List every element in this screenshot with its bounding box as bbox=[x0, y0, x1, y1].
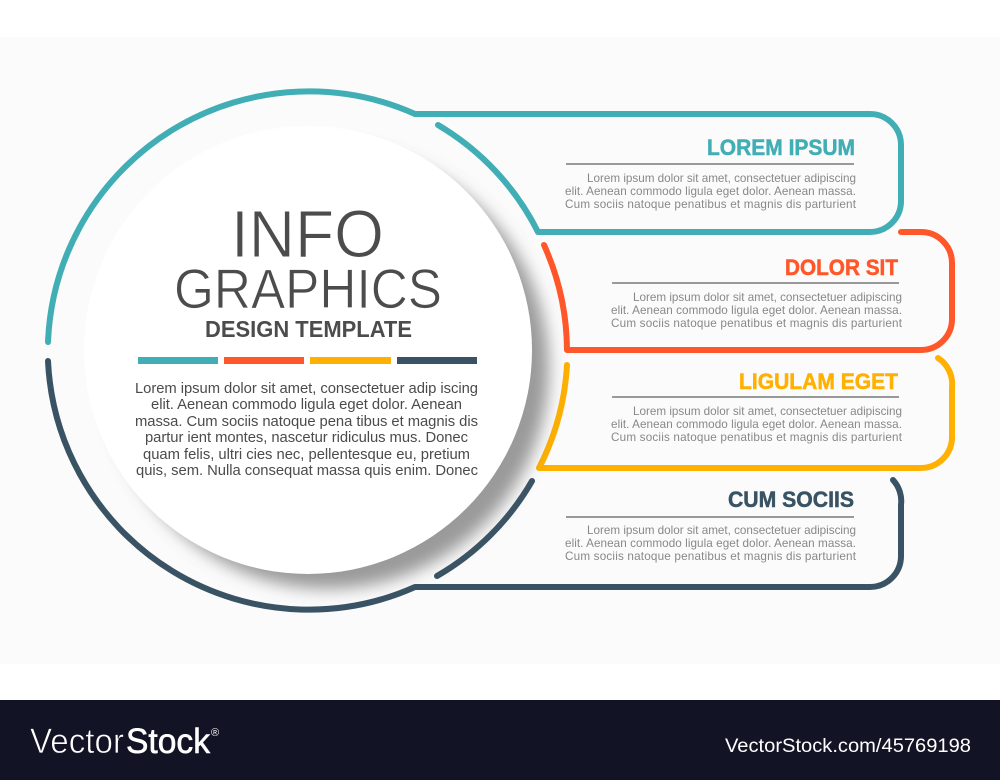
footer band bbox=[0, 700, 1000, 780]
central body text: massa. Cum sociis natoque pena tibus et magnis dis bbox=[135, 414, 478, 430]
text bbox=[565, 172, 857, 211]
central body text bbox=[135, 381, 479, 479]
text bbox=[611, 405, 903, 444]
footer logo: Vector bbox=[30, 722, 124, 761]
block 3: ligulam eget bbox=[611, 369, 903, 444]
block 2: dolor sit bbox=[611, 255, 903, 330]
panel: dolor sit outline bbox=[544, 232, 952, 350]
text: Cum sociis natoque penatibus et magnis dis parturient bbox=[565, 550, 857, 563]
title: info: INFO bbox=[231, 197, 384, 272]
text: Cum sociis natoque penatibus et magnis dis parturient bbox=[565, 198, 857, 211]
text: elit. Aenean commodo ligula eget dolor. Aenean massa. bbox=[611, 418, 902, 431]
text: Cum sociis natoque penatibus et magnis dis parturient bbox=[611, 431, 903, 444]
heading: DOLOR SIT bbox=[785, 255, 899, 280]
text: elit. Aenean commodo ligula eget dolor. Aenean massa. bbox=[611, 304, 902, 317]
heading: LIGULAM EGET bbox=[739, 369, 899, 394]
central white circle bbox=[84, 126, 532, 574]
panel: ligulam eget outline bbox=[539, 358, 952, 468]
block 4: cum sociis bbox=[565, 487, 857, 563]
central body text: Lorem ipsum dolor sit amet, consectetuer adip iscing bbox=[135, 381, 478, 397]
colour bars bbox=[138, 357, 477, 364]
heading: CUM SOCIIS bbox=[728, 487, 854, 512]
text bbox=[565, 524, 857, 563]
central body text: quis, sem. Nulla consequat massa quis enim. Donec bbox=[136, 463, 479, 479]
panel: lorem ipsum outline with outer arc bbox=[48, 91, 901, 342]
central body text: partur ient montes, nascetur ridiculus mus. Donec bbox=[145, 430, 469, 446]
text: elit. Aenean commodo ligula eget dolor. Aenean massa. bbox=[565, 537, 856, 550]
text: Lorem ipsum dolor sit amet, consectetuer adipiscing bbox=[633, 405, 902, 418]
title: graphics: GRAPHICS bbox=[174, 257, 442, 320]
central body text: elit. Aenean commodo ligula eget dolor. Aenean bbox=[151, 397, 462, 413]
central circle shadow bbox=[107, 147, 549, 589]
block 1: lorem ipsum bbox=[565, 135, 857, 211]
footer logo bbox=[30, 722, 219, 761]
subtitle: DESIGN TEMPLATE bbox=[205, 316, 412, 342]
text: Lorem ipsum dolor sit amet, consectetuer adipiscing bbox=[587, 172, 856, 185]
text: Lorem ipsum dolor sit amet, consectetuer adipiscing bbox=[633, 291, 902, 304]
text: Cum sociis natoque penatibus et magnis dis parturient bbox=[611, 317, 903, 330]
text bbox=[611, 291, 903, 330]
footer logo: ® bbox=[211, 727, 219, 739]
central body text: quam felis, ultri cies nec, pellentesque eu, pretium bbox=[143, 447, 470, 463]
text: Lorem ipsum dolor sit amet, consectetuer adipiscing bbox=[587, 524, 856, 537]
footer logo: Stock bbox=[126, 722, 210, 761]
footer id: VectorStock.com/45769198 bbox=[725, 736, 971, 757]
panel: cum sociis outline with outer arc bbox=[48, 361, 901, 610]
heading: LOREM IPSUM bbox=[707, 135, 855, 160]
text: elit. Aenean commodo ligula eget dolor. Aenean massa. bbox=[565, 185, 856, 198]
title block bbox=[174, 197, 442, 342]
